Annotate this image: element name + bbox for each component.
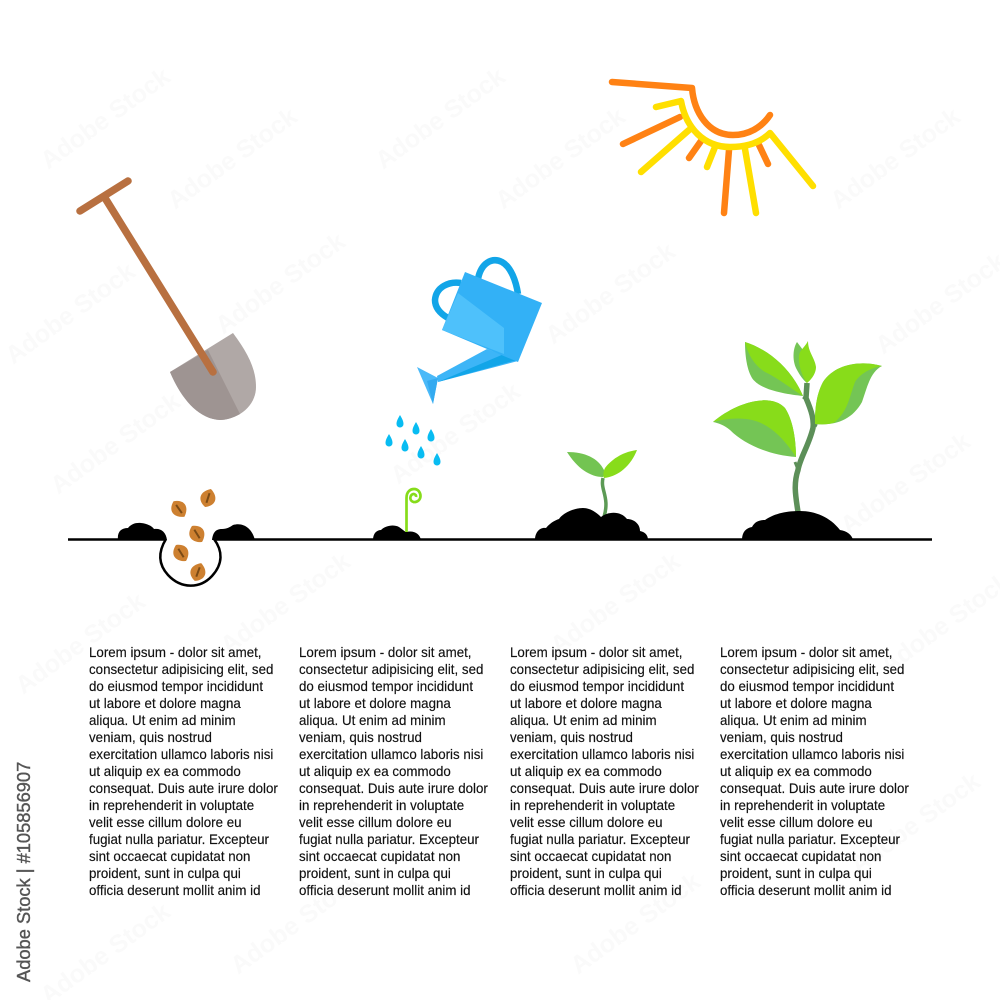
text block: column 4: ut labore et dolore magna bbox=[720, 696, 872, 711]
text: Adobe Stock bbox=[35, 62, 175, 175]
text block: column 3 bbox=[510, 644, 699, 898]
text block: column 1: ut labore et dolore magna bbox=[89, 696, 241, 711]
text block: column 2: velit esse cillum dolore eu bbox=[299, 815, 452, 830]
text block: column 2 bbox=[299, 644, 488, 898]
text block: column 2: aliqua. Ut enim ad minim bbox=[299, 713, 446, 728]
text block: column 1: proident, sunt in culpa qui bbox=[89, 866, 241, 881]
text block: column 3: do eiusmod tempor incididunt bbox=[510, 679, 684, 694]
text block: column 1: in reprehenderit in voluptate bbox=[89, 798, 254, 813]
text: Adobe Stock bbox=[835, 427, 975, 540]
text block: column 2: exercitation ullamco laboris nisi bbox=[299, 747, 483, 762]
text: Adobe Stock bbox=[162, 102, 302, 215]
text: Adobe Stock bbox=[45, 387, 185, 500]
text block: column 3: Lorem ipsum - dolor sit amet, bbox=[510, 644, 683, 660]
text block: column 4: ut aliquip ex ea commodo bbox=[720, 764, 872, 779]
text: Adobe Stock bbox=[0, 257, 140, 370]
text block: column 4: Lorem ipsum - dolor sit amet, bbox=[720, 644, 893, 660]
text block: column 4: velit esse cillum dolore eu bbox=[720, 815, 873, 830]
text block: column 4: do eiusmod tempor incididunt bbox=[720, 679, 894, 694]
stock credit label: Adobe Stock | #105856907 bbox=[13, 762, 34, 982]
text block: column 4: consequat. Duis aute irure dolor bbox=[720, 781, 909, 796]
icon: shovel bbox=[80, 181, 256, 420]
text block: column 3: sint occaecat cupidatat non bbox=[510, 849, 671, 864]
text block: column 3: aliqua. Ut enim ad minim bbox=[510, 713, 657, 728]
text block: column 3: proident, sunt in culpa qui bbox=[510, 866, 662, 881]
text: Adobe Stock bbox=[545, 547, 685, 660]
text block: column 1: consequat. Duis aute irure dolor bbox=[89, 781, 278, 796]
text block: column 1: consectetur adipisicing elit, sed bbox=[89, 662, 273, 677]
text block: column 1: sint occaecat cupidatat non bbox=[89, 849, 250, 864]
text block: column 3: exercitation ullamco laboris nisi bbox=[510, 747, 694, 762]
ground line bbox=[68, 538, 932, 541]
text block: column 3: consectetur adipisicing elit, sed bbox=[510, 662, 694, 677]
icon: sprout curl with soil bbox=[373, 489, 421, 540]
icon: water drops bbox=[386, 415, 440, 466]
text: Adobe Stock bbox=[225, 867, 365, 980]
text: Adobe Stock bbox=[825, 102, 965, 215]
text block: column 3: in reprehenderit in voluptate bbox=[510, 798, 675, 813]
text: Adobe Stock bbox=[845, 767, 985, 880]
text: Adobe Stock bbox=[565, 867, 705, 980]
leaf: upper left bbox=[745, 342, 803, 396]
text block: column 2: veniam, quis nostrud bbox=[299, 730, 422, 745]
text block: column 2: fugiat nulla pariatur. Excepteur bbox=[299, 832, 479, 847]
text block: column 1: ut aliquip ex ea commodo bbox=[89, 764, 241, 779]
text block: column 1: aliqua. Ut enim ad minim bbox=[89, 713, 236, 728]
text block: column 2: officia deserunt mollit anim id bbox=[299, 883, 471, 898]
text: Adobe Stock bbox=[210, 227, 350, 340]
text block: column 1: veniam, quis nostrud bbox=[89, 730, 212, 745]
text block: column 3: velit esse cillum dolore eu bbox=[510, 815, 663, 830]
text block: column 4: exercitation ullamco laboris nisi bbox=[720, 747, 904, 762]
text: Adobe Stock bbox=[370, 62, 510, 175]
leaf: lower left bbox=[713, 400, 796, 457]
text block: column 4 bbox=[720, 644, 909, 898]
text block: column 1: velit esse cillum dolore eu bbox=[89, 815, 242, 830]
text block: column 2: ut aliquip ex ea commodo bbox=[299, 764, 451, 779]
text block: column 2: ut labore et dolore magna bbox=[299, 696, 451, 711]
text block: column 4: proident, sunt in culpa qui bbox=[720, 866, 872, 881]
text block: column 4: fugiat nulla pariatur. Excepteur bbox=[720, 832, 900, 847]
text block: column 2: consectetur adipisicing elit, sed bbox=[299, 662, 483, 677]
text block: column 4: consectetur adipisicing elit, sed bbox=[720, 662, 904, 677]
text: Adobe Stock bbox=[215, 547, 355, 660]
text block: column 3: officia deserunt mollit anim id bbox=[510, 883, 682, 898]
icon: watering can bbox=[417, 260, 542, 404]
icon: planting hole with soil bbox=[118, 523, 255, 586]
leaf: top bud bbox=[794, 341, 816, 383]
text block: column 3: consequat. Duis aute irure dolor bbox=[510, 781, 699, 796]
text block: column 4: aliqua. Ut enim ad minim bbox=[720, 713, 867, 728]
icon: seeds bbox=[167, 487, 218, 583]
text block: column 2: proident, sunt in culpa qui bbox=[299, 866, 451, 881]
text: Adobe Stock bbox=[10, 587, 150, 700]
leaf: right bbox=[815, 363, 882, 424]
text block: column 2: in reprehenderit in voluptate bbox=[299, 798, 464, 813]
icon: seedling with soil bbox=[535, 450, 648, 540]
text block: column 2: do eiusmod tempor incididunt bbox=[299, 679, 473, 694]
text block: column 4: in reprehenderit in voluptate bbox=[720, 798, 885, 813]
text block: column 4: sint occaecat cupidatat non bbox=[720, 849, 881, 864]
text block: column 2: Lorem ipsum - dolor sit amet, bbox=[299, 644, 472, 660]
text block: column 3: ut labore et dolore magna bbox=[510, 696, 662, 711]
text block: column 1: do eiusmod tempor incididunt bbox=[89, 679, 263, 694]
text block: column 3: ut aliquip ex ea commodo bbox=[510, 764, 662, 779]
text: Adobe Stock bbox=[540, 237, 680, 350]
text block: column 1 bbox=[89, 644, 278, 898]
text block: column 1: exercitation ullamco laboris nisi bbox=[89, 747, 273, 762]
icon: sun bbox=[612, 82, 813, 213]
icon: grown plant with soil bbox=[713, 341, 882, 540]
text: Adobe Stock bbox=[385, 377, 525, 490]
text block: column 3: fugiat nulla pariatur. Excepteur bbox=[510, 832, 690, 847]
text block: column 1: officia deserunt mollit anim id bbox=[89, 883, 261, 898]
text block: column 4: officia deserunt mollit anim id bbox=[720, 883, 892, 898]
text block: column 3: veniam, quis nostrud bbox=[510, 730, 633, 745]
text block: column 2: sint occaecat cupidatat non bbox=[299, 849, 460, 864]
text: Adobe Stock bbox=[490, 102, 630, 215]
text block: column 2: consequat. Duis aute irure dolor bbox=[299, 781, 488, 796]
text block: column 1: fugiat nulla pariatur. Excepteur bbox=[89, 832, 269, 847]
text block: column 4: veniam, quis nostrud bbox=[720, 730, 843, 745]
text block: column 1: Lorem ipsum - dolor sit amet, bbox=[89, 644, 262, 660]
